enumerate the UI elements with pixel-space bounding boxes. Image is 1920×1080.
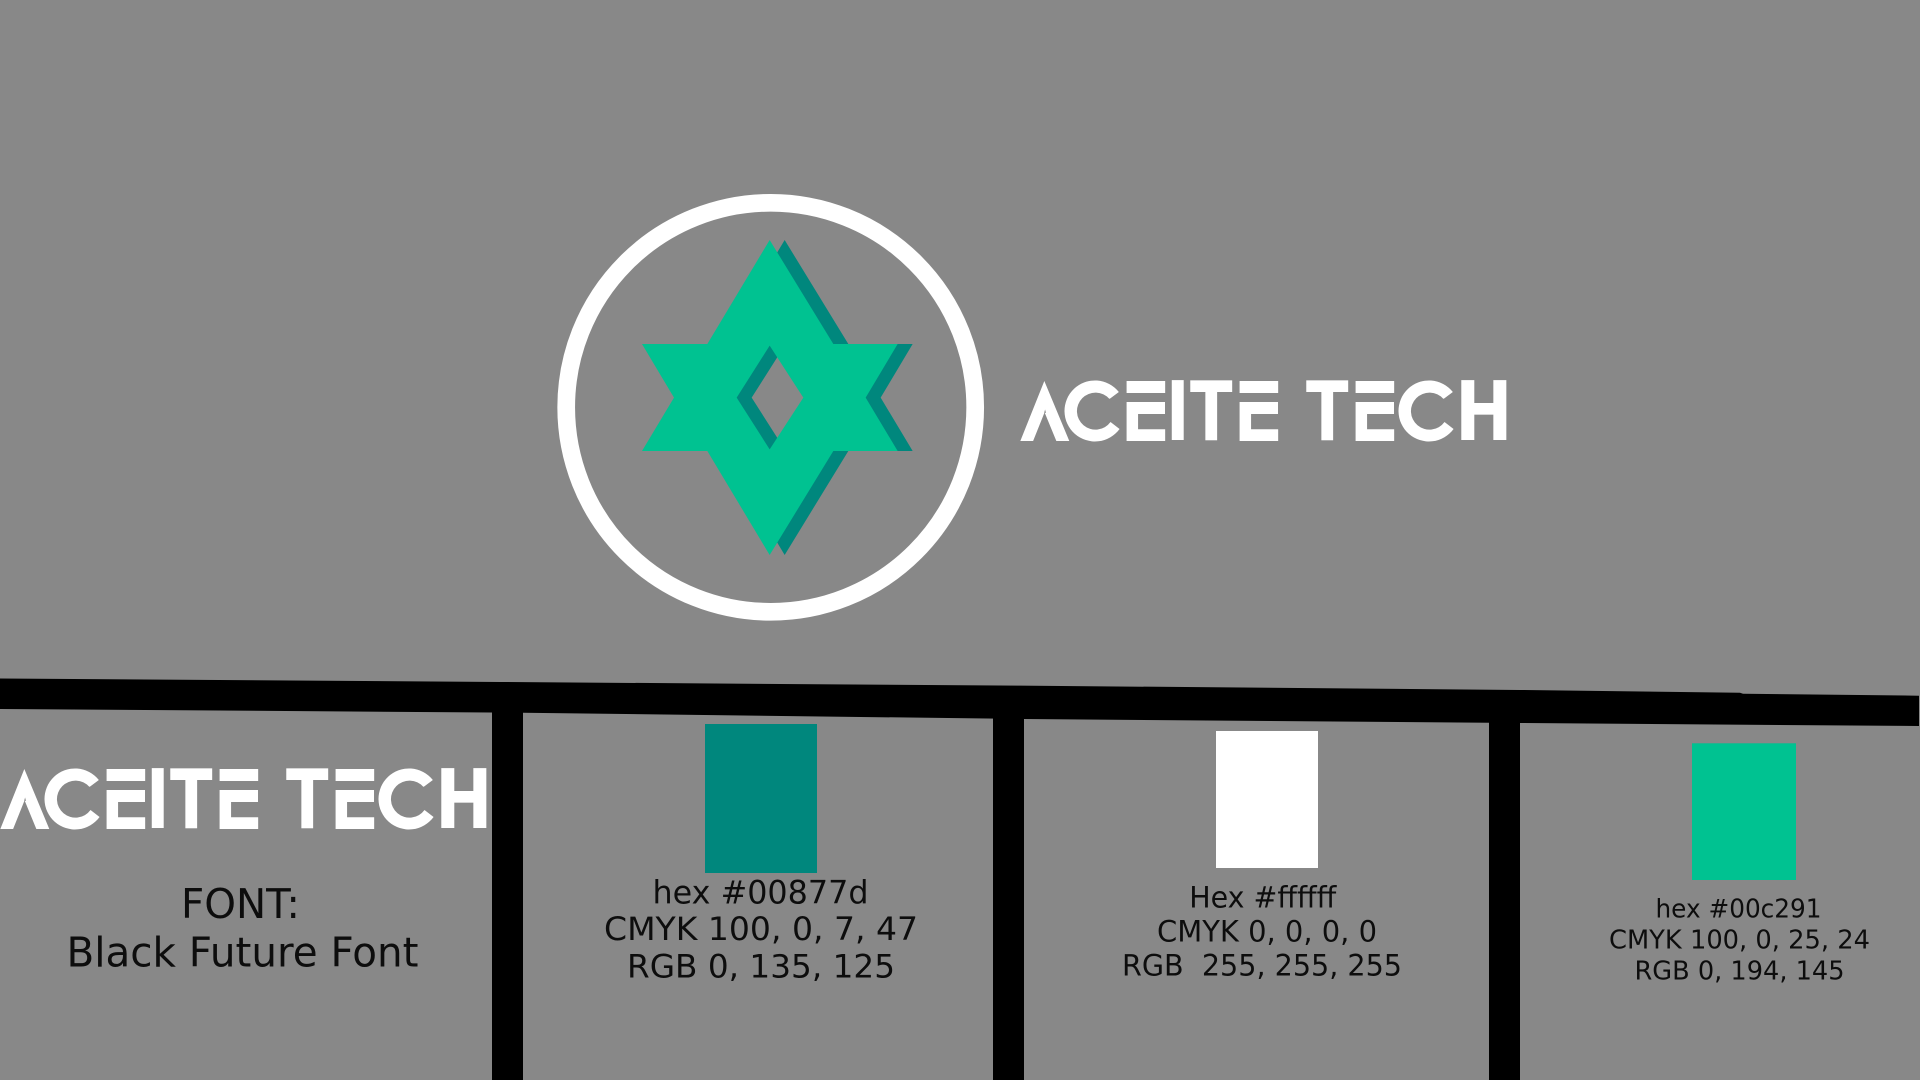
- green colour values: hex #00c291: [1656, 894, 1822, 924]
- star: [642, 240, 898, 555]
- white colour values: Hex #ffffff: [1189, 880, 1337, 914]
- wordmark: font sample: E: [213, 753, 263, 848]
- wordmark: font sample: T: [286, 753, 329, 848]
- wordmark: main logo: H: [1455, 365, 1512, 460]
- wordmark: font sample: E: [329, 753, 379, 848]
- divider frame: [0, 678, 1919, 1080]
- swatch: teal: [705, 724, 817, 873]
- wordmark: main logo: C: [1062, 365, 1124, 460]
- wordmark: main logo: E: [1233, 365, 1283, 460]
- wordmark: main logo: T: [1190, 365, 1233, 460]
- wordmark: font sample: T: [170, 753, 213, 848]
- green colour values: RGB 0, 194, 145: [1634, 956, 1844, 986]
- wordmark: font sample: H: [435, 753, 492, 848]
- green colour values: [1609, 894, 1870, 986]
- wordmark: main logo: C: [1396, 365, 1458, 460]
- white colour values: CMYK 0, 0, 0, 0: [1157, 915, 1377, 949]
- wordmark: main logo: A: [1020, 365, 1070, 460]
- wordmark: font sample: C: [42, 753, 104, 848]
- wordmark: main logo: I: [1166, 365, 1190, 460]
- wordmark: font sample: E: [100, 753, 150, 848]
- swatch: green: [1692, 743, 1796, 880]
- font specification: Black Future Font: [66, 929, 418, 977]
- wordmark: main logo: E: [1349, 365, 1399, 460]
- wordmark: main logo: T: [1306, 365, 1349, 460]
- font specification: [66, 880, 418, 977]
- wordmark: main logo: [1020, 365, 1512, 460]
- wordmark: font sample: A: [0, 753, 50, 848]
- green colour values: CMYK 100, 0, 25, 24: [1609, 925, 1870, 955]
- white colour values: RGB 255, 255, 255: [1122, 949, 1402, 983]
- wordmark: main logo: E: [1120, 365, 1170, 460]
- star shadow: [657, 240, 913, 555]
- teal colour values: [604, 873, 918, 985]
- swatch: white: [1216, 731, 1318, 868]
- teal colour values: hex #00877d: [652, 873, 868, 911]
- wordmark: font sample: I: [146, 753, 170, 848]
- wordmark: font sample: C: [376, 753, 438, 848]
- white colour values: [1122, 880, 1402, 983]
- wordmark: font sample: [0, 753, 492, 848]
- logo ring: [566, 203, 975, 612]
- teal colour values: CMYK 100, 0, 7, 47: [604, 910, 918, 948]
- font specification: FONT:: [181, 880, 300, 928]
- logo emblem: [566, 203, 975, 612]
- teal colour values: RGB 0, 135, 125: [627, 947, 895, 985]
